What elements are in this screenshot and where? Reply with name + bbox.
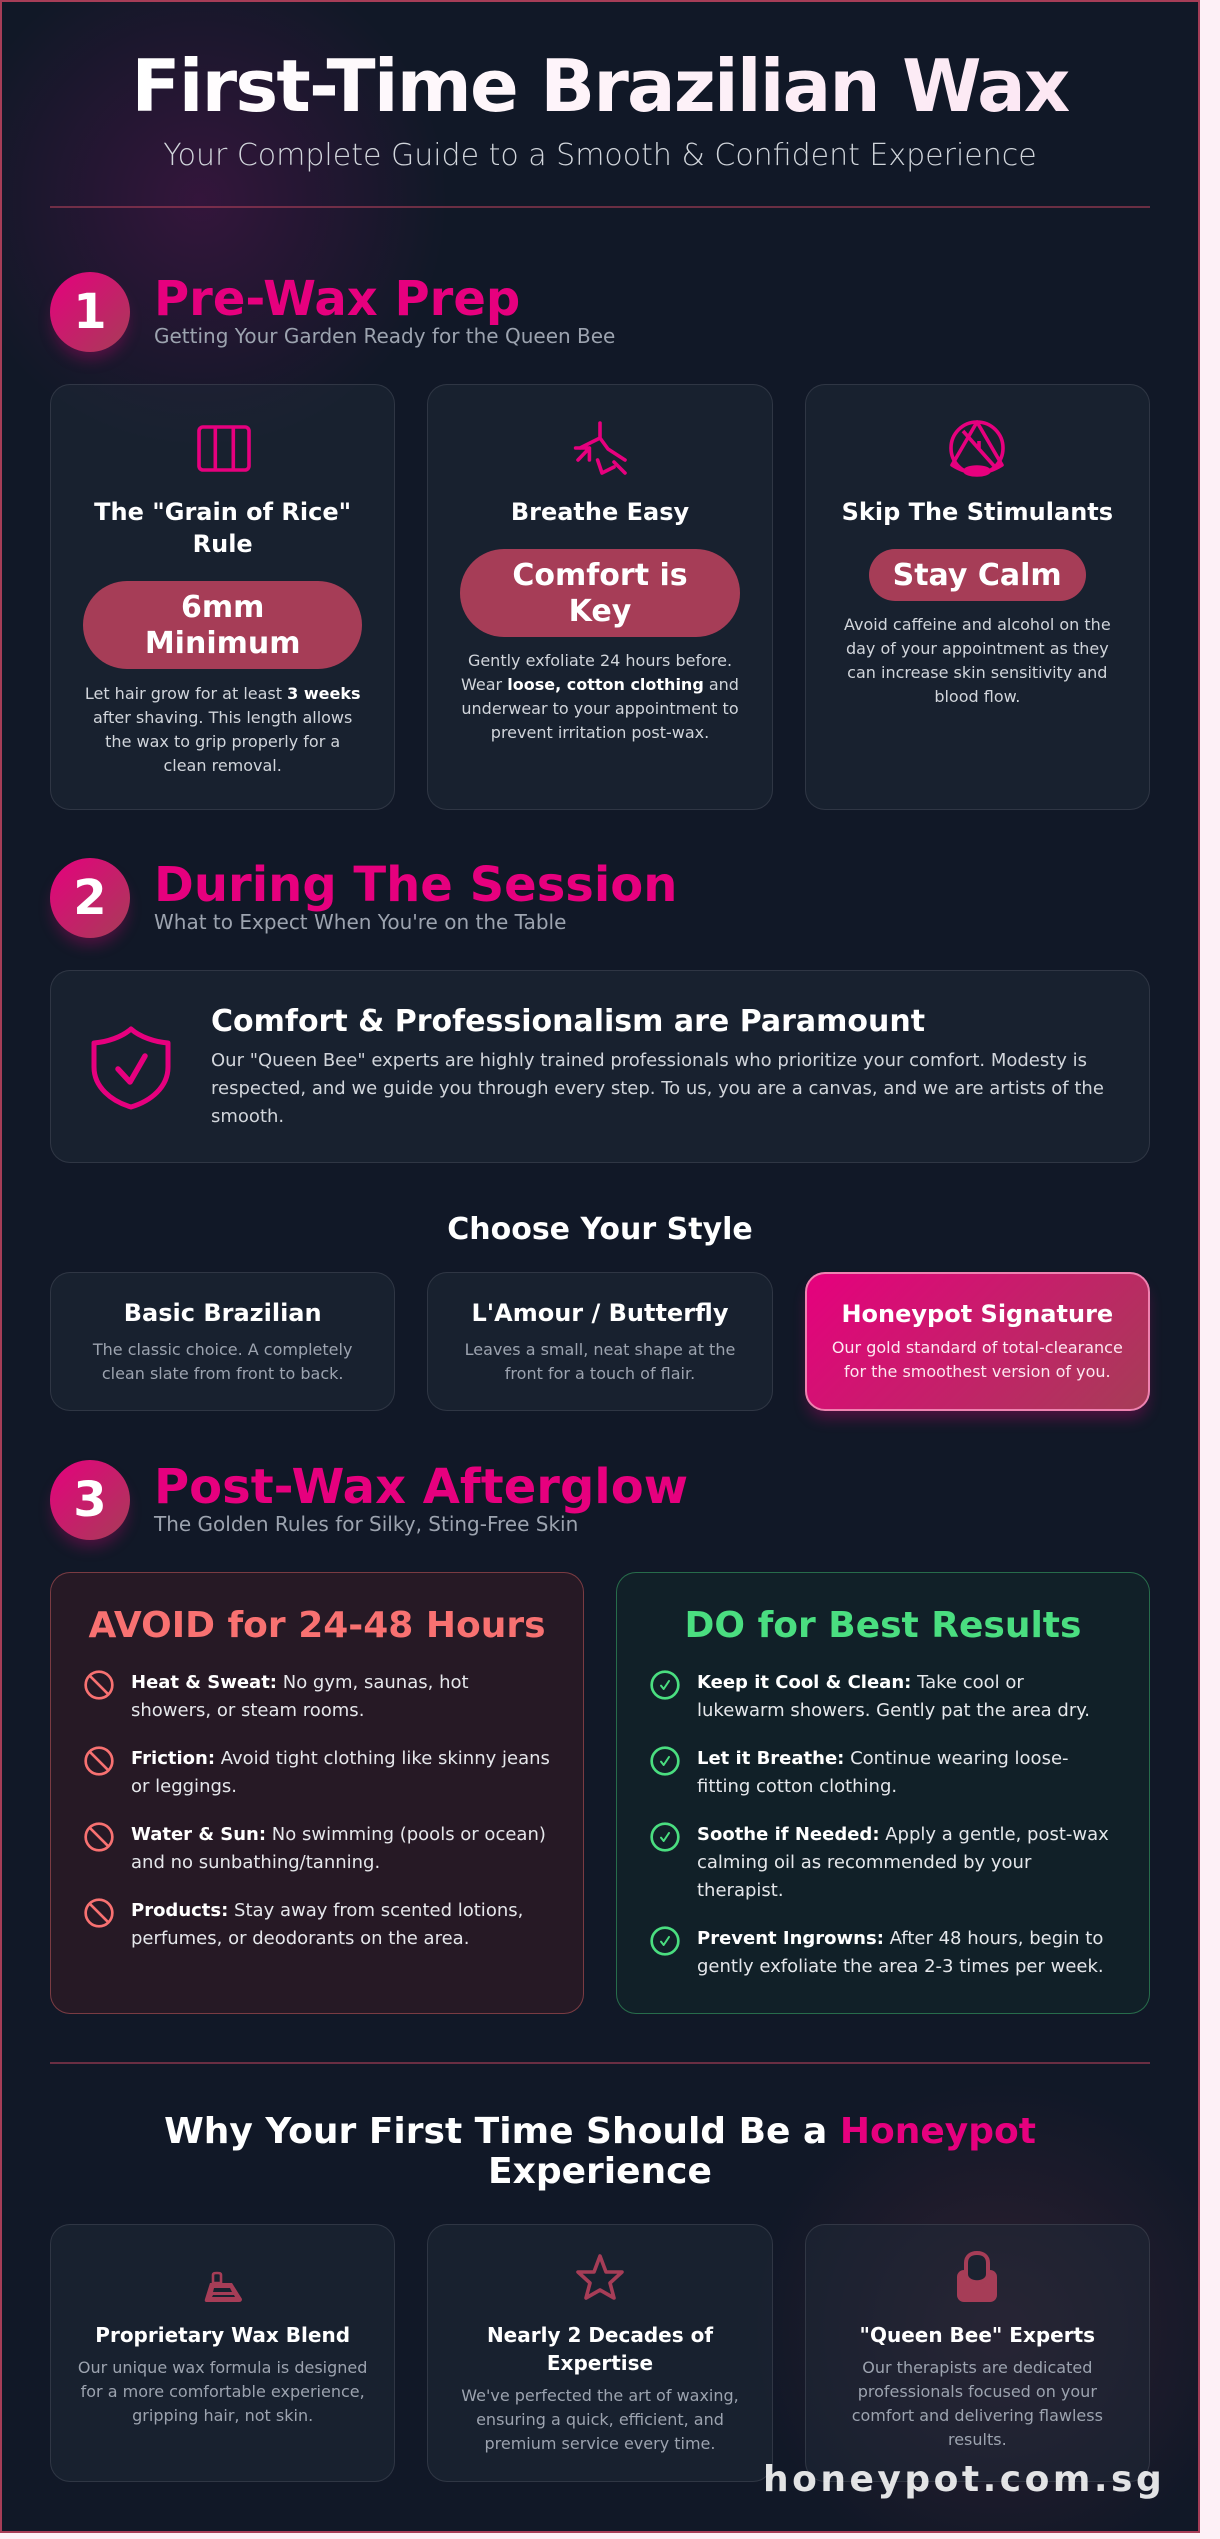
card text: gripping hair, not skin.: [132, 2406, 313, 2425]
card text: prevent irritation post-wax.: [491, 723, 709, 742]
item: water and sun: Water & Sun: No swimming (pools or ocean): [131, 1824, 546, 1845]
item: water and sun: and no sunbathing/tanning.: [131, 1852, 380, 1873]
pill: 6mm minimum: Minimum: [145, 626, 300, 661]
style description: clean slate from front to back.: [102, 1364, 343, 1383]
item: soothe: calming oil as recommended by your: [697, 1852, 1031, 1873]
card text: Gently exfoliate 24 hours before.: [468, 651, 732, 670]
item: let it breathe: fitting cotton clothing.: [697, 1776, 897, 1797]
card heading: Breathe Easy: [511, 498, 689, 526]
panel: grain of rice rule: [50, 384, 395, 810]
card heading: Skip The Stimulants: [842, 498, 1113, 526]
card text: We've perfected the art of waxing,: [461, 2386, 739, 2405]
item: soothe: Soothe if Needed: Apply a gentle, post-wax: [697, 1824, 1109, 1845]
item: heat and sweat: showers, or steam rooms.: [131, 1700, 364, 1721]
item: prevent ingrowns: [697, 1928, 1104, 1977]
pill: stay calm: Stay Calm: [893, 558, 1062, 593]
section 1 number badge: 1: [73, 284, 107, 340]
card heading: Rule: [193, 530, 253, 558]
item: friction: or leggings.: [131, 1776, 237, 1797]
card text: Let hair grow for at least 3 weeks: [85, 684, 360, 703]
panel: nearly 2 decades: [427, 2224, 773, 2482]
style description: [465, 1340, 735, 1383]
pill: stay calm: [869, 549, 1086, 601]
item: products: perfumes, or deodorants on the area.: [131, 1928, 469, 1949]
heading: why honeypot: [164, 2111, 1036, 2192]
style name: Basic Brazilian: [124, 1299, 322, 1327]
card text: the wax to grip properly for a: [105, 732, 340, 751]
panel heading: Comfort & Professionalism are Paramount: [211, 1004, 925, 1039]
style description: The classic choice. A completely: [93, 1340, 352, 1359]
item: let it breathe: Let it Breathe: Continue wearing loose-: [697, 1748, 1069, 1769]
icon: lock: [957, 2251, 997, 2302]
heading: why honeypot: Why Your First Time Should Be a Honeypot: [164, 2111, 1036, 2152]
card text: underwear to your appointment to: [461, 699, 739, 718]
style description: [92, 1340, 352, 1383]
style name: L'Amour / Butterfly: [472, 1299, 728, 1327]
pill: comfort is key: Key: [569, 594, 631, 629]
section 1 number badge: [50, 272, 130, 352]
panel: queen bee experts: [805, 2224, 1150, 2482]
card text: blood flow.: [934, 687, 1020, 706]
panel: proprietary wax blend: [50, 2224, 395, 2482]
avoid list: [84, 1670, 550, 1949]
item: products: Products: Stay away from scented lotions,: [131, 1900, 523, 1921]
card text: ensuring a quick, efficient, and: [476, 2410, 724, 2429]
style description: front for a touch of flair.: [505, 1364, 695, 1383]
icon: check circle: [650, 1926, 680, 1956]
section 1 heading: Pre-Wax Prep: [154, 271, 520, 327]
pill: 6mm minimum: 6mm: [181, 590, 264, 625]
item: prevent ingrowns: Prevent Ingrowns: After 48 hours, begin to: [697, 1928, 1103, 1949]
card text: [844, 615, 1111, 706]
card text: clean removal.: [163, 756, 282, 775]
panel text: Our "Queen Bee" experts are highly trained professionals who prioritize your comfort. Modesty is: [211, 1050, 1087, 1071]
panel: honeypot signature: [805, 1272, 1150, 1411]
card text: [85, 684, 360, 775]
card text: Our unique wax formula is designed: [78, 2358, 367, 2377]
pill: comfort is key: [460, 549, 740, 637]
style name: Honeypot Signature: [841, 1300, 1113, 1328]
section 2 number badge: 2: [73, 870, 107, 926]
icon: branching air: [574, 421, 627, 475]
icon: check circle: [650, 1670, 680, 1700]
item: heat and sweat: [131, 1672, 469, 1721]
item: prevent ingrowns: gently exfoliate the area 2-3 times per week.: [697, 1956, 1104, 1977]
item: soothe: [697, 1824, 1109, 1901]
icon: shield check: [92, 1026, 170, 1110]
panel: l'amour butterfly: [427, 1272, 773, 1411]
card heading: Proprietary Wax Blend: [95, 2323, 350, 2347]
card heading: "Queen Bee" Experts: [860, 2323, 1095, 2347]
panel: do: [616, 1572, 1150, 2014]
do list: [650, 1670, 1109, 1977]
title: First-Time Brazilian Wax: [131, 44, 1069, 128]
panel: avoid: [50, 1572, 584, 2014]
card text: [461, 2386, 739, 2453]
panel text: [211, 1050, 1104, 1127]
item: let it breathe: [697, 1748, 1069, 1797]
section 2 subheading: What to Expect When You're on the Table: [154, 910, 566, 934]
icon: hair columns: [197, 425, 251, 472]
pill: comfort is key: Comfort is: [512, 558, 688, 593]
panel text: respected, and we guide you through every step. To us, you are a canvas, and we are artists of the: [211, 1078, 1104, 1099]
style description: Leaves a small, neat shape at the: [465, 1340, 735, 1359]
section 3 subheading: The Golden Rules for Silky, Sting-Free Skin: [154, 1512, 578, 1536]
card text: Avoid caffeine and alcohol on the: [844, 615, 1111, 634]
card text: after shaving. This length allows: [93, 708, 352, 727]
card text: [852, 2358, 1103, 2449]
card text: day of your appointment as they: [846, 639, 1109, 658]
icon: ban: [84, 1670, 114, 1700]
item: water and sun: [131, 1824, 546, 1873]
subtitle: Your Complete Guide to a Smooth & Confident Experience: [163, 138, 1037, 173]
card text: Wear loose, cotton clothing and: [461, 675, 739, 694]
section 3 number badge: [50, 1460, 130, 1540]
panel text: smooth.: [211, 1106, 284, 1127]
icon: ban: [84, 1822, 114, 1852]
heading: why honeypot: Experience: [488, 2151, 712, 2192]
panel: breathe easy: [427, 384, 773, 810]
section 2 number badge: [50, 858, 130, 938]
card text: [78, 2358, 367, 2425]
pill: 6mm minimum: [83, 581, 362, 669]
card heading: [487, 2323, 714, 2375]
icon: star: [576, 2254, 624, 2300]
panel: comfort and professionalism: [50, 970, 1150, 1163]
panel: skip the stimulants: [805, 384, 1150, 810]
card heading: [94, 498, 351, 558]
card text: comfort and delivering flawless: [852, 2406, 1103, 2425]
website link: honeypot.com.sg: [763, 2459, 1165, 2500]
card text: premium service every time.: [484, 2434, 715, 2453]
style description: [832, 1338, 1123, 1381]
section 3 heading: Post-Wax Afterglow: [154, 1459, 688, 1515]
item: keep it cool: lukewarm showers. Gently pat the area dry.: [697, 1700, 1090, 1721]
item: friction: [131, 1748, 550, 1797]
panel: basic brazilian: [50, 1272, 395, 1411]
card text: can increase skin sensitivity and: [847, 663, 1107, 682]
item: friction: Friction: Avoid tight clothing like skinny jeans: [131, 1748, 550, 1769]
section 3 number badge: 3: [73, 1472, 107, 1528]
section 1 subheading: Getting Your Garden Ready for the Queen Bee: [154, 324, 615, 348]
panel heading: AVOID for 24-48 Hours: [88, 1605, 546, 1646]
card heading: Expertise: [547, 2351, 653, 2375]
item: keep it cool: Keep it Cool & Clean: Take cool or: [697, 1672, 1024, 1693]
icon: wax pot: [204, 2272, 242, 2302]
card text: professionals focused on your: [858, 2382, 1097, 2401]
card text: [461, 651, 739, 742]
card text: Our therapists are dedicated: [862, 2358, 1092, 2377]
icon: check circle: [650, 1746, 680, 1776]
icon: check circle: [650, 1822, 680, 1852]
item: keep it cool: [697, 1672, 1090, 1721]
icon: no stimulants: [949, 420, 1005, 477]
card heading: The "Grain of Rice": [94, 498, 351, 526]
style description: for the smoothest version of you.: [844, 1362, 1111, 1381]
style description: Our gold standard of total-clearance: [832, 1338, 1123, 1357]
panel heading: DO for Best Results: [685, 1605, 1081, 1646]
item: soothe: therapist.: [697, 1880, 784, 1901]
heading: choose your style: Choose Your Style: [447, 1212, 753, 1247]
icon: ban: [84, 1898, 114, 1928]
item: products: [131, 1900, 523, 1949]
item: heat and sweat: Heat & Sweat: No gym, saunas, hot: [131, 1672, 469, 1693]
card text: for a more comfortable experience,: [81, 2382, 365, 2401]
card heading: Nearly 2 Decades of: [487, 2323, 713, 2347]
card text: results.: [948, 2430, 1007, 2449]
section 2 heading: During The Session: [154, 857, 677, 913]
icon: ban: [84, 1746, 114, 1776]
